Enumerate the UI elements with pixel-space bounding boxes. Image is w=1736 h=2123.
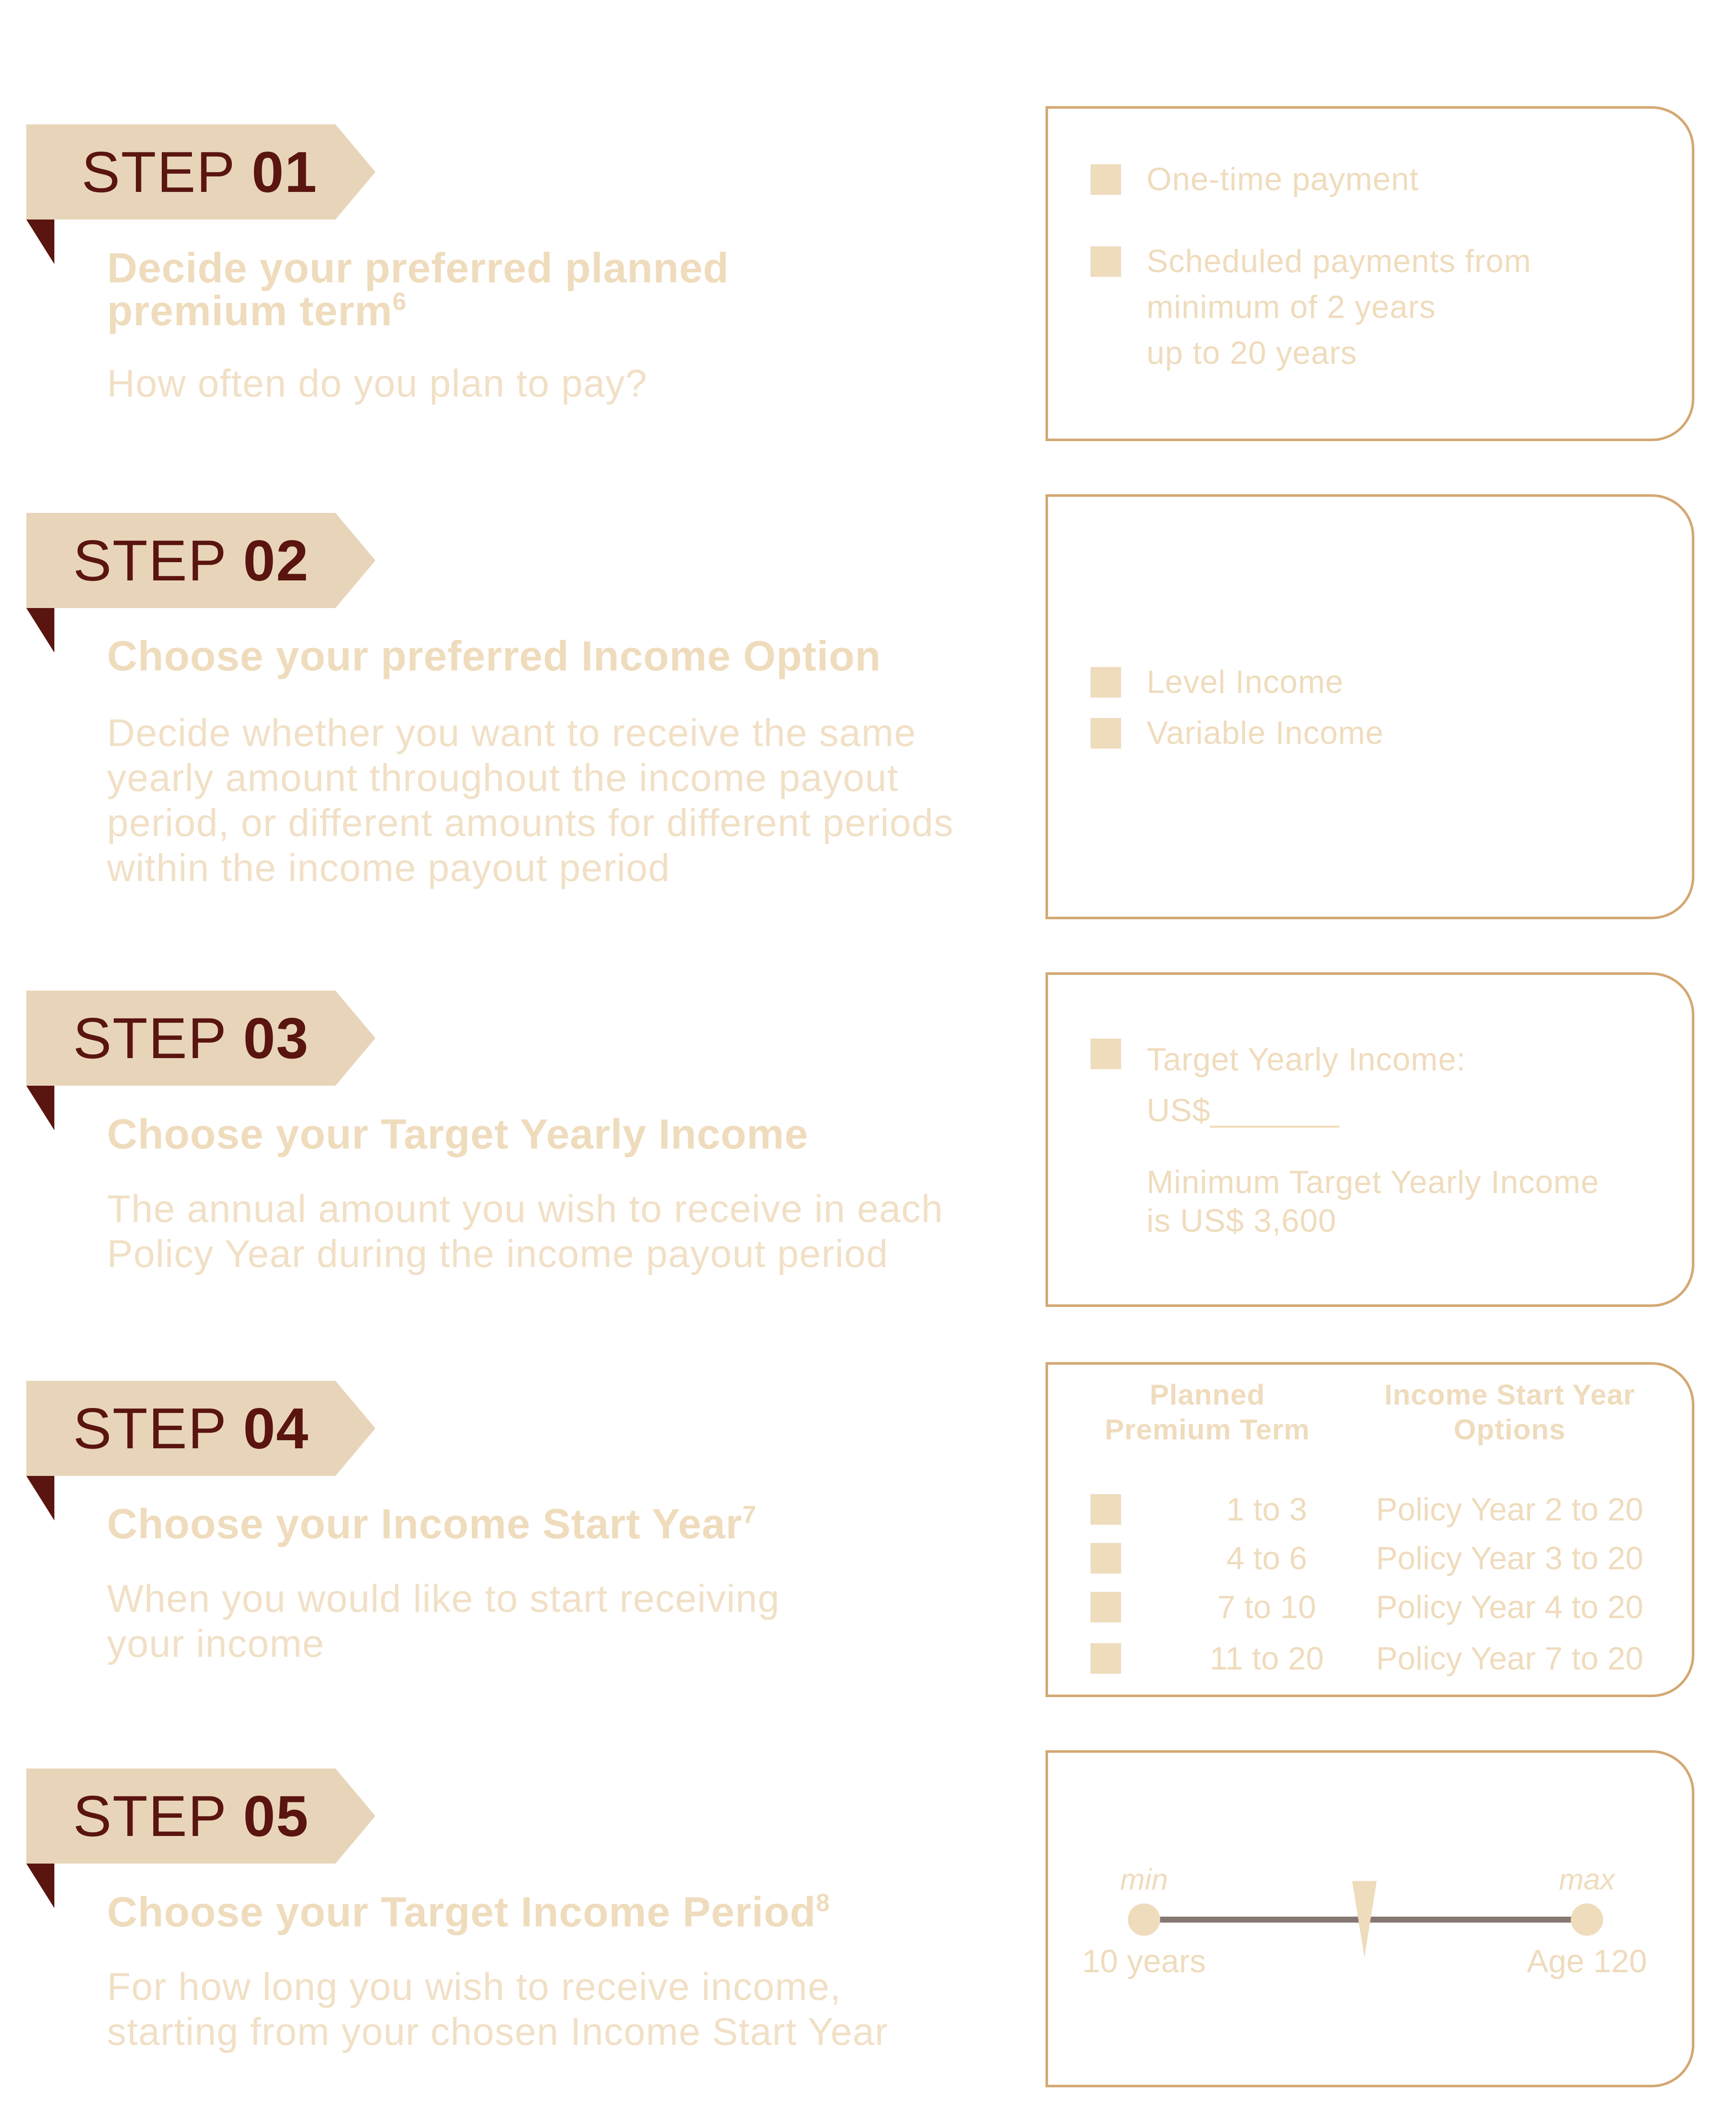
tab: step 05 xyxy=(26,1768,375,1864)
text: step 02 xyxy=(107,711,954,891)
panel: step 03 options xyxy=(1046,972,1694,1307)
heading: step 02: Choose your preferred Income Option xyxy=(107,632,881,679)
panel: step 04 table xyxy=(1046,1362,1694,1697)
table rows: 4 to 6 xyxy=(1226,1540,1307,1577)
flag xyxy=(26,1086,54,1130)
text: step 02: period, or different amounts for different periods xyxy=(107,802,954,845)
text: step 04: your income xyxy=(107,1622,324,1665)
label: 10 years: 10 years xyxy=(1082,1943,1206,1979)
table rows: 1 to 3 xyxy=(1226,1492,1307,1528)
step 03 xyxy=(0,968,1736,1312)
option text: scheduled: minimum of 2 years xyxy=(1147,289,1436,325)
pointer xyxy=(1352,1881,1377,1957)
option text: scheduled: Scheduled payments from xyxy=(1147,243,1531,279)
tab: step 03: STEP 03 xyxy=(73,1006,309,1070)
option: variable xyxy=(1091,718,1121,749)
table header: planned premium term: Planned xyxy=(1150,1379,1265,1411)
label: min: min xyxy=(1120,1863,1168,1896)
table header: planned premium term xyxy=(1104,1377,1310,1447)
option text: target income xyxy=(1147,1034,1466,1136)
step 02 xyxy=(0,488,1736,926)
option text: variable: Variable Income xyxy=(1147,715,1384,751)
tab: step 02: STEP 02 xyxy=(73,528,309,593)
table rows: Policy Year 3 to 20 xyxy=(1376,1540,1643,1577)
heading: step 01: Decide your preferred planned xyxy=(107,244,729,291)
tab: step 03 xyxy=(26,991,375,1086)
label: max: max xyxy=(1559,1863,1616,1896)
text: step 02: Decide whether you want to receive the same xyxy=(107,712,916,755)
table header: income start year: Income Start Year xyxy=(1384,1379,1635,1411)
option: scheduled xyxy=(1091,246,1121,277)
tab: step 05: STEP 05 xyxy=(73,1784,309,1848)
option text: target income: US$_______ xyxy=(1147,1092,1339,1129)
flag xyxy=(26,1864,54,1908)
panel: step 01 options xyxy=(1046,106,1694,441)
heading: step 01 xyxy=(107,246,729,332)
row 4 xyxy=(1091,1643,1121,1674)
row 3 xyxy=(1091,1592,1121,1622)
step 05 xyxy=(0,1745,1736,2093)
note: minimum: is US$ 3,600 xyxy=(1147,1203,1336,1239)
option: one-time xyxy=(1091,164,1121,195)
table rows: 11 to 20 xyxy=(1209,1641,1324,1677)
option: target income xyxy=(1091,1039,1121,1069)
note: minimum: Minimum Target Yearly Income xyxy=(1147,1164,1599,1200)
text: step 04 xyxy=(107,1577,780,1667)
table rows: Policy Year 4 to 20 xyxy=(1376,1589,1643,1625)
tab: step 04 xyxy=(26,1381,375,1476)
table header: income start year xyxy=(1372,1377,1648,1447)
table rows: Policy Year 2 to 20 xyxy=(1376,1492,1643,1528)
text: step 03 xyxy=(107,1187,944,1277)
option text: one-time: One-time payment xyxy=(1147,161,1419,197)
text: step 05 xyxy=(107,1965,888,2055)
tab: step 01: STEP 01 xyxy=(82,140,318,204)
tab: step 04: STEP 04 xyxy=(73,1396,309,1461)
row 2 xyxy=(1091,1543,1121,1574)
text: step 04: When you would like to start receiving xyxy=(107,1577,780,1620)
text: step 03: Policy Year during the income payout period xyxy=(107,1233,888,1275)
option text: scheduled xyxy=(1147,239,1531,376)
step 04 xyxy=(0,1359,1736,1703)
tab: step 02 xyxy=(26,513,375,608)
option text: level: Level Income xyxy=(1147,664,1344,700)
flag xyxy=(26,1476,54,1520)
heading: step 04: Choose your Income Start Year7 xyxy=(107,1500,756,1547)
track xyxy=(1144,1917,1587,1923)
text: step 02: within the income payout period xyxy=(107,847,670,890)
flag xyxy=(26,220,54,264)
table rows xyxy=(1062,1486,1677,1690)
option text: scheduled: up to 20 years xyxy=(1147,335,1357,371)
table header: income start year: Options xyxy=(1454,1413,1566,1446)
heading: step 03: Choose your Target Yearly Income xyxy=(107,1110,808,1157)
table rows: 7 to 10 xyxy=(1217,1589,1316,1625)
text: step 03: The annual amount you wish to receive in each xyxy=(107,1188,944,1230)
text: step 02: yearly amount throughout the income payout xyxy=(107,757,899,800)
table header: planned premium term: Premium Term xyxy=(1105,1413,1310,1446)
row 1 xyxy=(1091,1494,1121,1525)
panel: step 02 options xyxy=(1046,494,1694,919)
endpoints xyxy=(1128,1903,1160,1936)
table rows: Policy Year 7 to 20 xyxy=(1376,1641,1643,1677)
step 01 xyxy=(0,102,1736,450)
note: minimum xyxy=(1147,1163,1599,1240)
option text: target income: Target Yearly Income: xyxy=(1147,1042,1466,1078)
tab: step 01 xyxy=(26,124,375,220)
flag xyxy=(26,608,54,653)
option: level xyxy=(1091,667,1121,698)
panel: step 05 slider xyxy=(1046,1750,1694,2087)
slider xyxy=(1046,1745,1694,2085)
heading: step 01: premium term6 xyxy=(107,287,406,334)
heading: step 05: Choose your Target Income Period8 xyxy=(107,1888,830,1935)
label: age 120: Age 120 xyxy=(1527,1943,1647,1979)
text: step 05: starting from your chosen Income Start Year xyxy=(107,2010,888,2053)
text: step 05: For how long you wish to receive income, xyxy=(107,1965,841,2008)
text: step 01: How often do you plan to pay? xyxy=(107,362,648,405)
